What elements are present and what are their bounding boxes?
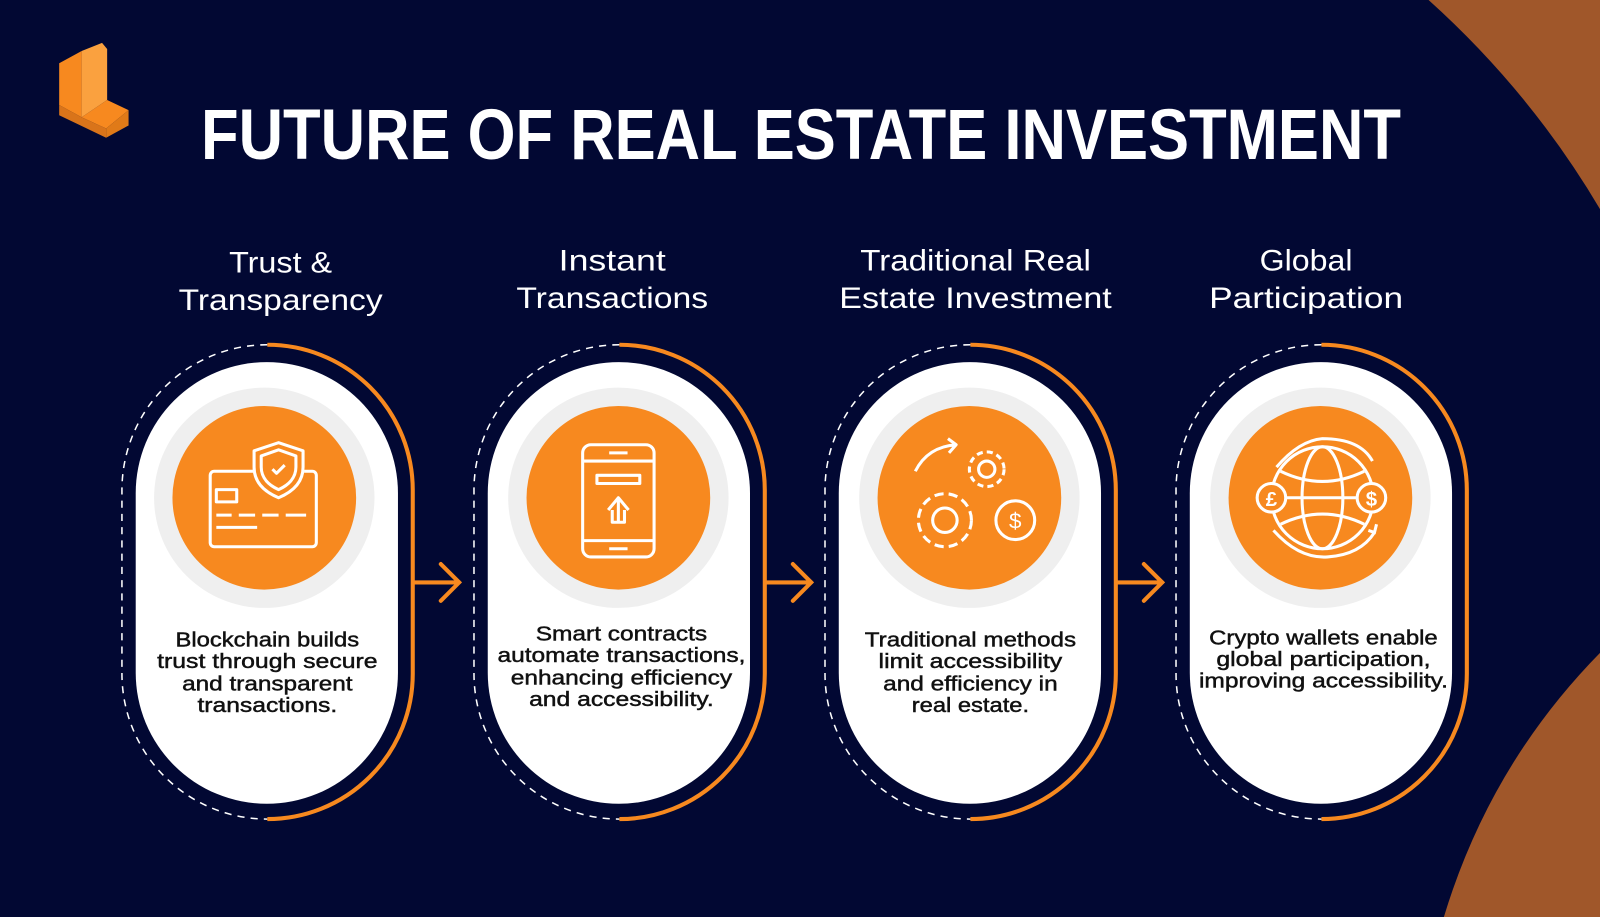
card 3: Traditional Real Estate Investment: limit accessibility [879,651,1062,673]
card 1: Trust & Transparency: Transparency [179,284,383,317]
card 1: Trust & Transparency: trust through secure [157,651,378,673]
title: FUTURE OF REAL ESTATE INVESTMENT [201,95,1401,175]
card 2: Instant Transactions: and accessibility. [529,689,714,711]
card 3: Traditional Real Estate Investment [825,244,1116,819]
card 4: Global Participation: Global [1260,244,1353,277]
icon: gears and dollar: $ [1009,508,1022,533]
icon: globe currency: £ [1266,489,1278,511]
card 2: Instant Transactions: enhancing efficiency [511,667,732,689]
icon: globe currency: $ [1366,489,1378,511]
card 1: Trust & Transparency: and transparent [182,674,353,696]
card 3: Traditional Real Estate Investment: Estate Investment [839,282,1112,315]
card 1: Trust & Transparency: transactions. [197,695,337,717]
card 2: Instant Transactions: Smart contracts [536,624,707,646]
icon: card shield [210,443,316,547]
card 2: Instant Transactions [474,244,765,819]
logo [59,43,129,138]
card 2: Instant Transactions: Transactions [516,282,708,315]
card 4: Global Participation [1176,244,1467,819]
card 4: Global Participation: Crypto wallets enable [1209,628,1438,650]
icon: globe currency [1257,439,1386,557]
card 2: Instant Transactions: automate transactions, [497,645,745,667]
card 3: Traditional Real Estate Investment: and efficiency in [883,674,1058,696]
card 4: Global Participation: global participation, [1216,649,1431,671]
card 3: Traditional Real Estate Investment: Traditional Real [860,244,1091,277]
arrow 1 [413,564,459,601]
card 3: Traditional Real Estate Investment: Traditional methods [865,630,1076,652]
card 1: Trust & Transparency [122,246,413,819]
icon: gears and dollar [915,439,1035,547]
icon: phone upload [583,445,654,557]
card 1: Trust & Transparency: Blockchain builds [176,630,359,652]
card 1: Trust & Transparency: Trust & [229,246,332,279]
arrow 2 [765,564,811,601]
card 4: Global Participation: Participation [1209,282,1403,315]
card 2: Instant Transactions: Instant [559,244,666,277]
card 4: Global Participation: improving accessibility. [1199,670,1448,692]
arrow 3 [1116,564,1162,601]
card 3: Traditional Real Estate Investment: real estate. [912,695,1029,717]
